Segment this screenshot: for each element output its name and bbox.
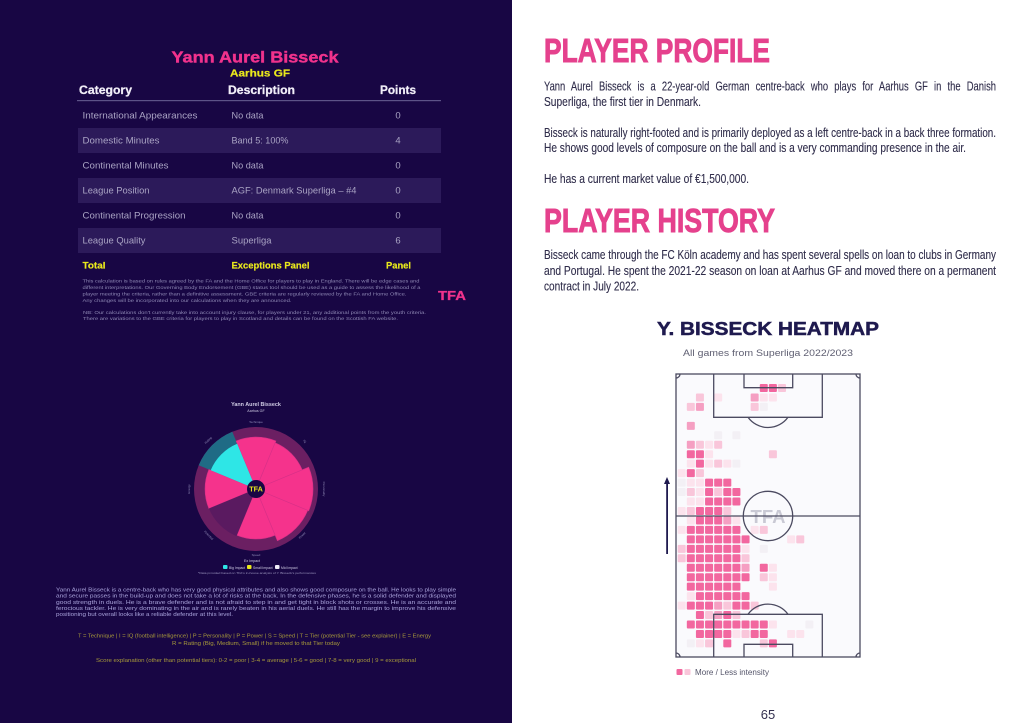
heatmap title: Y. BISSECK HEATMAP	[657, 319, 879, 339]
row: International Appearances: International Appearances	[82, 110, 198, 122]
pitch lines	[676, 374, 860, 657]
text: history paragraph: contract in July 2022.	[544, 278, 639, 294]
row: League Quality: 6	[395, 236, 401, 246]
radar axis labels: IQ	[302, 439, 308, 444]
scouting summary text: ferocious tackler. He is very dominating in the air and is rarely beaten in his aerial duels. He still has the margin to improve his defensive	[56, 606, 456, 612]
key to ratings: T = Technique | I = IQ (football intelligence) | P = Personality | P = Power | S = Speed | T = Tier (potential Tier - see explainer) | E = Energy	[78, 634, 431, 640]
page number: 65	[761, 707, 775, 722]
radar title: Aarhus GF	[247, 409, 265, 413]
text: profile paragraphs	[544, 78, 996, 186]
chart: polar radar	[194, 427, 318, 551]
panel: left dark page	[0, 0, 512, 723]
pitch watermark: TFA	[750, 507, 786, 527]
radar axis labels: Rating	[204, 436, 213, 445]
radar axis labels: Personality	[322, 482, 326, 497]
radar axis labels	[187, 420, 326, 557]
row: International Appearances	[82, 110, 401, 122]
radar title: Yann Aurel Bisseck	[231, 402, 281, 408]
radar legend	[198, 559, 317, 575]
row: Domestic Minutes: Domestic Minutes	[82, 136, 160, 146]
radar legend: Ex Impact	[244, 559, 260, 563]
table footnotes: There are variations to the GBE criteria for players to play in Scotland and details can be found on the Scottish FA website.	[83, 316, 398, 321]
row: Domestic Minutes	[78, 128, 441, 153]
row: League Quality: League Quality	[82, 236, 146, 246]
bar: cyan wedge	[211, 444, 256, 489]
player title: Yann Aurel Bisseck	[172, 50, 339, 66]
table header: Description	[228, 85, 295, 97]
radar legend: *Data provided based on TFA's in-house analysis of Y. Bisseck's performances	[198, 571, 317, 575]
radar legend: Mid Impact	[281, 566, 298, 570]
table footnotes: different interpretations. Our Governing Body Endorsement (GBE) status tool should be used as a guide to assess the likelihood of a	[82, 285, 421, 290]
scouting summary text: Yann Aurel Bisseck is a centre-back who has very good physical attributes and also shows good composure on the ball. He looks to play simple	[56, 588, 456, 594]
table header: Category	[79, 85, 133, 97]
row: Total: Panel	[386, 260, 411, 272]
row: Total	[82, 260, 411, 272]
row: International Appearances: 0	[395, 110, 401, 122]
TFA logo: TFA	[438, 288, 467, 303]
table header	[77, 85, 441, 101]
row: League Position: 0	[395, 186, 401, 196]
radar axis labels: Technique	[249, 420, 263, 424]
ring segment: teal	[199, 432, 256, 489]
key to ratings	[78, 634, 431, 664]
table footnotes: Any changes will be incorporated into our calculations when they are announced.	[82, 298, 292, 303]
radar title	[231, 402, 281, 413]
table footnotes: player meeting the criteria, rather than a definitive assessment. GBE criteria are regularly reviewed by the FA and Home Office.	[82, 292, 406, 296]
row: League Quality: Superliga	[232, 236, 272, 246]
table footnotes	[82, 278, 426, 321]
heatmap subtitle: All games from Superliga 2022/2023	[683, 348, 853, 359]
table footnotes: This calculation is based on rules agreed by the FA and the Home Office for players to play in England. There will be edge cases and	[82, 278, 420, 284]
table header: Points	[380, 85, 416, 97]
radar legend: Small Impact	[253, 566, 273, 570]
key to ratings: Score explanation (other than potential tiers): 0-2 = poor | 3-4 = average | 5-6 = good | 7-8 = very good | 9 = exceptional	[96, 658, 416, 664]
table: GBE points	[77, 85, 441, 272]
row: Continental Minutes: No data	[232, 160, 264, 172]
scouting summary text	[56, 588, 456, 618]
row: League Position: AGF: Denmark Superliga – #4	[232, 186, 356, 196]
scouting summary text: and secure passes in the build-up and does not take a lot of risks at the back. In the defensive phases, he is a solid defender and displayed	[56, 594, 456, 600]
row: International Appearances: No data	[232, 110, 264, 122]
row: Domestic Minutes: Band 5: 100%	[232, 136, 289, 146]
radar axis labels: Speed	[252, 553, 261, 557]
row: League Position	[78, 178, 441, 203]
radar centre logo: TFA	[249, 485, 263, 494]
radar axis labels: Power	[298, 531, 307, 540]
heatmap cells	[678, 384, 813, 647]
row: Continental Minutes	[82, 160, 401, 172]
row: Continental Progression: Continental Progression	[82, 210, 186, 222]
club subtitle: Aarhus GF	[230, 68, 290, 80]
scouting summary text: good strength in duels. He is a brave defender and is not afraid to step in and get tight in block shots or crosses. He is an accurate and	[56, 600, 456, 606]
radar axis labels: Potential	[203, 530, 214, 541]
row: Continental Progression	[82, 210, 401, 222]
bar: dark wedge	[209, 489, 256, 536]
text: history paragraph	[544, 247, 996, 294]
heading: player history: PLAYER HISTORY	[544, 202, 775, 239]
row: Continental Progression: No data	[232, 210, 264, 222]
row: Total: Exceptions Panel	[232, 260, 310, 272]
radar legend: Big Impact	[229, 566, 245, 570]
row: Continental Progression: 0	[395, 210, 401, 222]
bars: pink	[205, 437, 313, 541]
heading: player profile: PLAYER PROFILE	[544, 32, 770, 69]
panel: right white page	[512, 0, 1024, 723]
chart: heatmap pitch	[676, 374, 860, 657]
table footnotes: NB: Our calculations don't currently take into account injury clause, for players under 21, any additional points from the youth criteria.	[83, 310, 426, 315]
radar axis labels: Energy	[187, 484, 191, 494]
row: Continental Minutes: Continental Minutes	[82, 160, 169, 172]
row: League Quality	[78, 228, 441, 253]
row: Total: Total	[82, 260, 106, 272]
scouting summary text: positioning but overall looks like a reliable defender at this level.	[56, 612, 233, 618]
row: Domestic Minutes: 4	[395, 136, 401, 146]
row: Continental Minutes: 0	[395, 160, 401, 172]
arrow: attack direction	[664, 477, 670, 554]
key to ratings: R = Rating (Big, Medium, Small) if he moved to that Tier today	[172, 641, 340, 647]
text: profile paragraphs: Superliga, the first tier in Denmark.	[544, 94, 701, 109]
heatmap legend: More / Less intensity	[695, 668, 769, 677]
row: League Position: League Position	[82, 186, 150, 196]
text: profile paragraphs: He has a current market value of €1,500,000.	[544, 171, 749, 186]
